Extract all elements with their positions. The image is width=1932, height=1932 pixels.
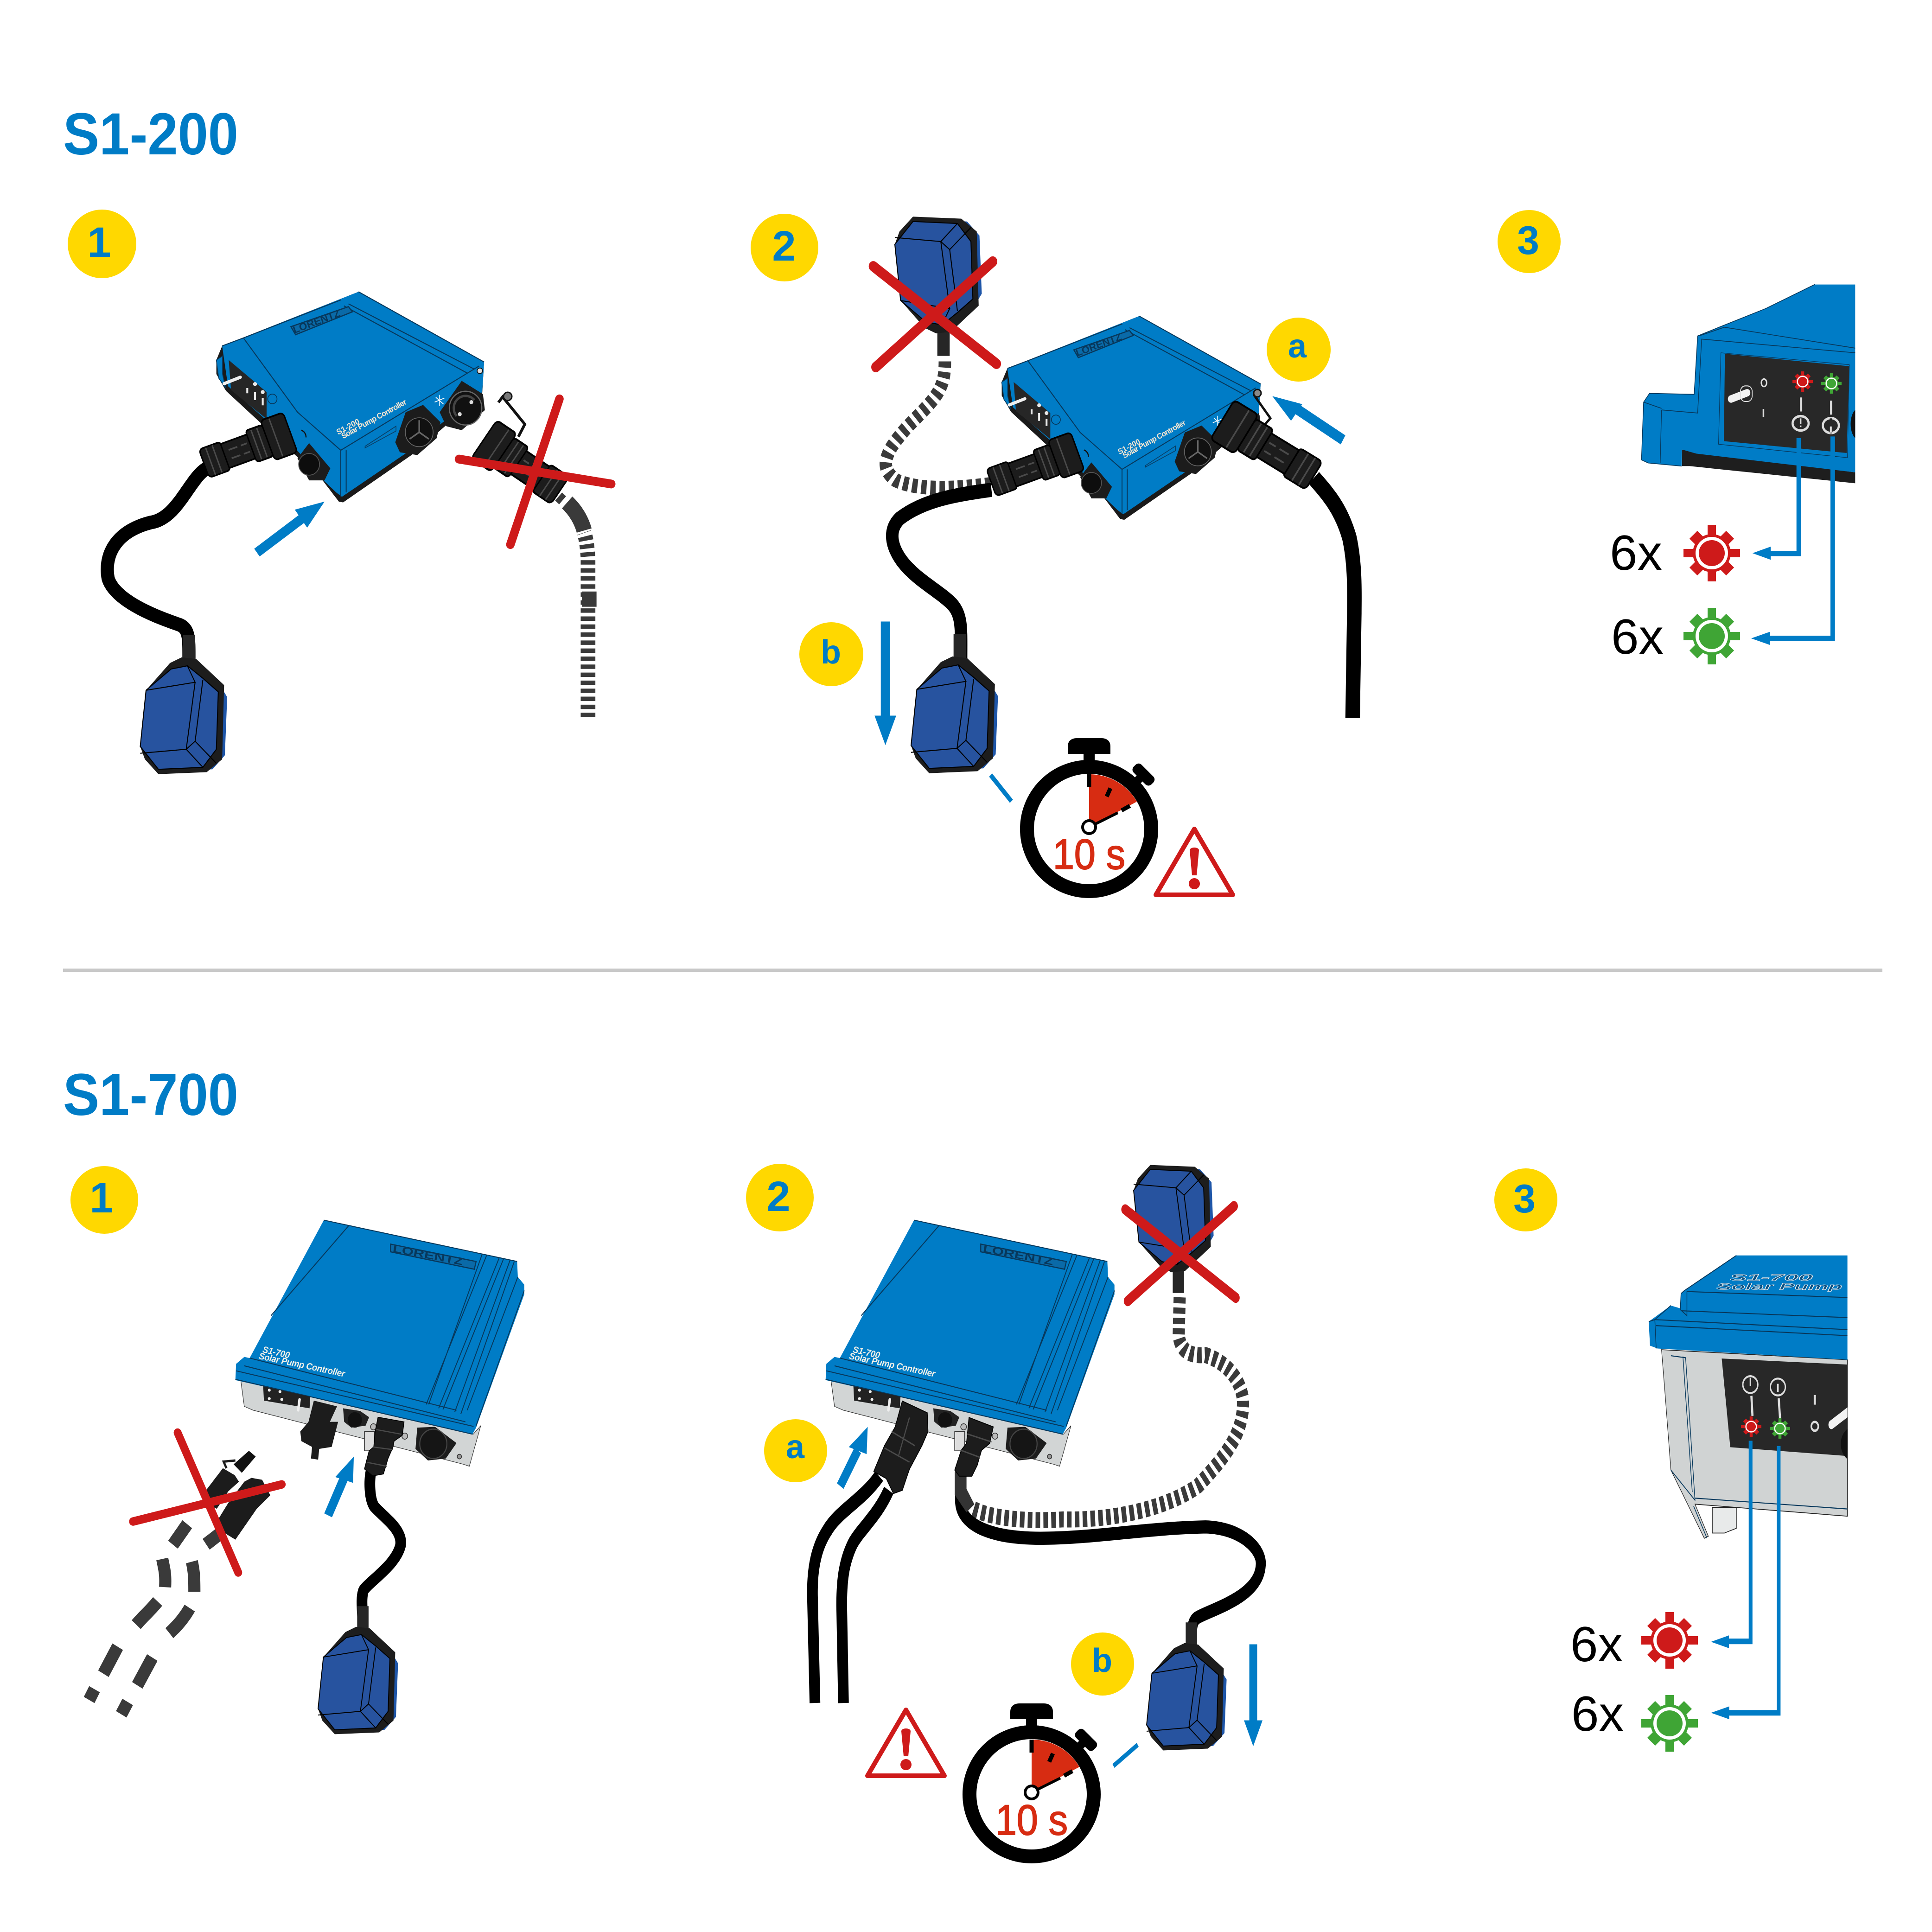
badge b: [799, 622, 863, 686]
controller S1-200: S1-200: [335, 417, 361, 437]
leader line red: [1728, 1441, 1751, 1641]
text 6x red: 6x: [1570, 1616, 1623, 1672]
cable to float switch: [107, 468, 207, 659]
arrow a: [1272, 396, 1343, 440]
controller S1-700: [236, 1220, 524, 1466]
controller S1-200: [1002, 316, 1262, 520]
model text on lid: S1-700: [1730, 1273, 1813, 1283]
controller S1-700: S1-700: [852, 1345, 881, 1361]
cable to float switch: [892, 490, 991, 661]
text 6x green: 6x: [1611, 609, 1664, 664]
controller S1-700: LORENTZ: [982, 1243, 1054, 1268]
stopwatch 10 s: [1027, 738, 1156, 891]
control panel: [1722, 1358, 1848, 1456]
float switch: [911, 634, 998, 773]
connector plug crossed out: [471, 392, 573, 510]
panel: S1-700 step 3: [1494, 1168, 1870, 1752]
controller S1-200: [217, 292, 485, 503]
float switch: [1147, 1622, 1227, 1750]
leader line red: [1770, 438, 1799, 554]
dashed cable not connected: [557, 494, 597, 717]
dashed cable not connected: [886, 361, 991, 488]
float switch crossed out: [1134, 1165, 1214, 1293]
float switch: [318, 1606, 398, 1734]
controller close-up: [1649, 1256, 1870, 1719]
badge 2: [746, 1164, 814, 1231]
connector plug: [364, 1417, 404, 1476]
tick to stopwatch: [991, 775, 1012, 801]
icon: red blink: [1683, 525, 1740, 581]
badge a: [764, 1419, 827, 1482]
controller S1-700: LORENTZ: [392, 1243, 464, 1268]
stopwatch 10 s: [969, 1703, 1099, 1856]
toggle switch: [1829, 1407, 1848, 1459]
power cable: [1314, 478, 1354, 718]
arrow b: [874, 621, 896, 745]
float switch crossed out: [895, 217, 982, 356]
leader line green: [1728, 1446, 1779, 1713]
float switch: [140, 635, 227, 774]
controller S1-200: Solar Pump Controller: [340, 397, 408, 441]
title: S1-700: S1-700: [63, 1062, 238, 1128]
stopwatch 10 s: 10 s: [1053, 831, 1125, 878]
badge 3: [1498, 210, 1561, 273]
illustration: S1-200 step 1: [107, 292, 597, 717]
cable to float switch: [362, 1472, 401, 1628]
text 6x red: 6x: [1610, 525, 1662, 580]
warning triangle: [867, 1710, 944, 1776]
badge b: [1071, 1632, 1134, 1696]
badge b: b: [1092, 1642, 1112, 1679]
tick to stopwatch: [1114, 1745, 1138, 1766]
panel: S1-200 step 1: [68, 210, 611, 774]
arrows and cross: [874, 261, 1343, 801]
arrow b: [1244, 1644, 1262, 1746]
badge a: a: [1288, 328, 1307, 365]
solar cables: [812, 1476, 889, 1703]
LED green small: [1770, 1418, 1790, 1439]
red cross: [1125, 1206, 1236, 1301]
warning triangle: [1156, 829, 1233, 895]
badge 1: [68, 210, 136, 278]
badge 1: [70, 1166, 138, 1234]
controller S1-200: Solar Pump Controller: [1121, 418, 1187, 460]
controller S1-700: S1-700: [261, 1345, 291, 1361]
red cross: [874, 261, 996, 367]
text 6x green: 6x: [1571, 1686, 1624, 1741]
panel: S1-200 step 3: [1498, 210, 1867, 664]
badge 3: 3: [1517, 218, 1539, 263]
badge 1: 1: [87, 219, 111, 266]
badge 3: 3: [1513, 1177, 1536, 1221]
controller S1-700: [826, 1220, 1115, 1466]
controller close-up: Solar Pump: [1716, 1282, 1842, 1292]
cable to float switch: [960, 1479, 1261, 1648]
connector plug: [955, 1417, 993, 1476]
solar connector plugged in: [300, 1401, 338, 1460]
connector plug right: [1211, 389, 1326, 495]
badge 3: [1494, 1168, 1557, 1231]
toggle switch: [1731, 386, 1752, 402]
LED red small: [1741, 1416, 1761, 1437]
badge a: a: [786, 1428, 805, 1466]
arrow: [328, 1457, 354, 1515]
cables: [886, 361, 1354, 718]
dashed cables not connected: [89, 1524, 221, 1714]
controller S1-200: LORENTZ: [292, 308, 342, 336]
controller S1-700: Solar Pump Controller: [848, 1351, 937, 1379]
panel: S1-200 step 2: [751, 214, 1354, 895]
badge 2: 2: [766, 1173, 791, 1220]
arrow: [257, 502, 325, 553]
controller close-up: [1641, 285, 1867, 645]
controller S1-700: Solar Pump Controller: [258, 1351, 346, 1379]
solar connectors: [874, 1401, 928, 1493]
red cross: [133, 1433, 282, 1573]
dashed cable not connected: [974, 1293, 1243, 1520]
badge 1: 1: [89, 1174, 114, 1222]
controller S1-200: S1-200: [1116, 437, 1141, 456]
badge 2: 2: [772, 223, 796, 270]
badge a: [1267, 318, 1331, 382]
stopwatch 10 s: 10 s: [995, 1797, 1068, 1844]
arrow a: [840, 1427, 868, 1486]
divider: [63, 969, 1882, 972]
solar connectors crossed out: [206, 1451, 270, 1540]
LED green small: [1821, 373, 1842, 394]
connector plug left: [984, 432, 1084, 502]
icon: green blink: [1641, 1695, 1698, 1752]
badge 2: [751, 214, 818, 281]
controller S1-200: LORENTZ: [1074, 332, 1123, 359]
badge b: b: [821, 634, 841, 671]
panel: S1-700 step 2: [746, 1164, 1262, 1856]
icon: red blink: [1641, 1612, 1698, 1669]
leader line green: [1769, 436, 1833, 638]
LED red small: [1792, 371, 1813, 392]
title: S1-200: S1-200: [63, 101, 238, 167]
red cross: [459, 399, 611, 545]
connector plug left: [197, 412, 298, 484]
control panel: [1724, 354, 1849, 453]
cable stub: [955, 1472, 975, 1512]
icon: green blink: [1683, 608, 1740, 664]
panel: S1-700 step 1: [70, 1166, 524, 1734]
